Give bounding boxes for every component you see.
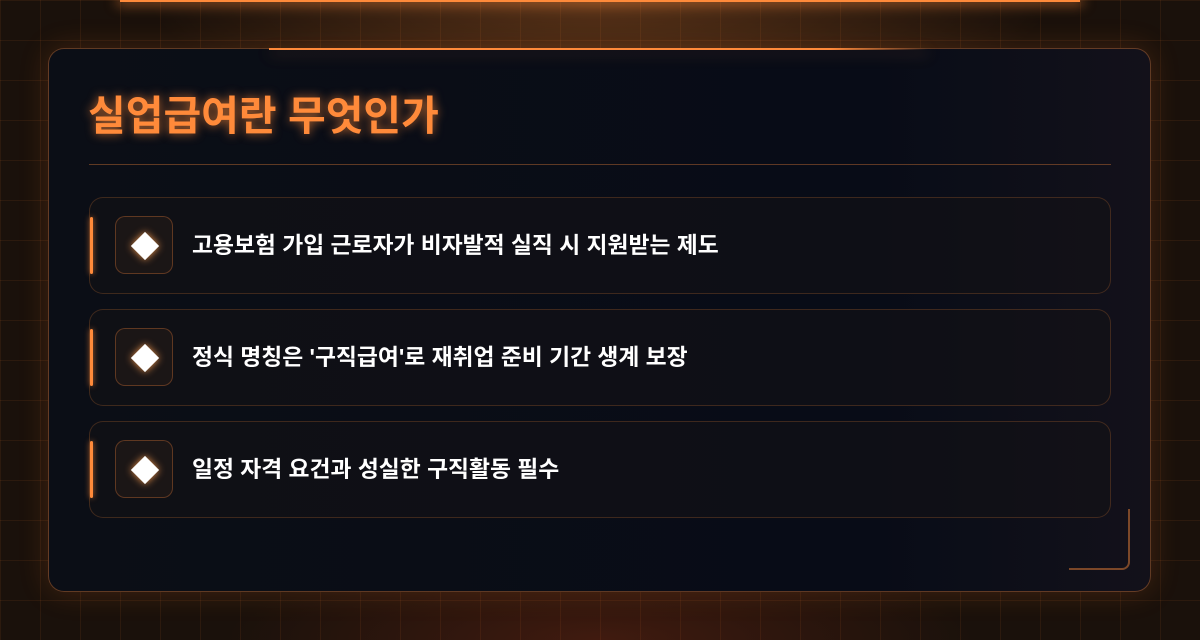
corner bracket decoration — [1069, 509, 1130, 570]
icon: diamond — [115, 328, 173, 386]
title: 실업급여란 무엇인가 — [88, 93, 439, 139]
text: item 2: 정식 명칭은 '구직급여'로 재취업 준비 기간 생계 보장 — [192, 344, 688, 370]
panel: main card — [48, 48, 1151, 592]
text: item 1: 고용보험 가입 근로자가 비자발적 실직 시 지원받는 제도 — [192, 232, 719, 258]
text: item 3: 일정 자격 요건과 성실한 구직활동 필수 — [192, 456, 559, 482]
list item 2 — [89, 309, 1111, 406]
list item 3 — [89, 421, 1111, 518]
icon: diamond — [115, 440, 173, 498]
icon: diamond — [115, 216, 173, 274]
list item 1 — [89, 197, 1111, 294]
